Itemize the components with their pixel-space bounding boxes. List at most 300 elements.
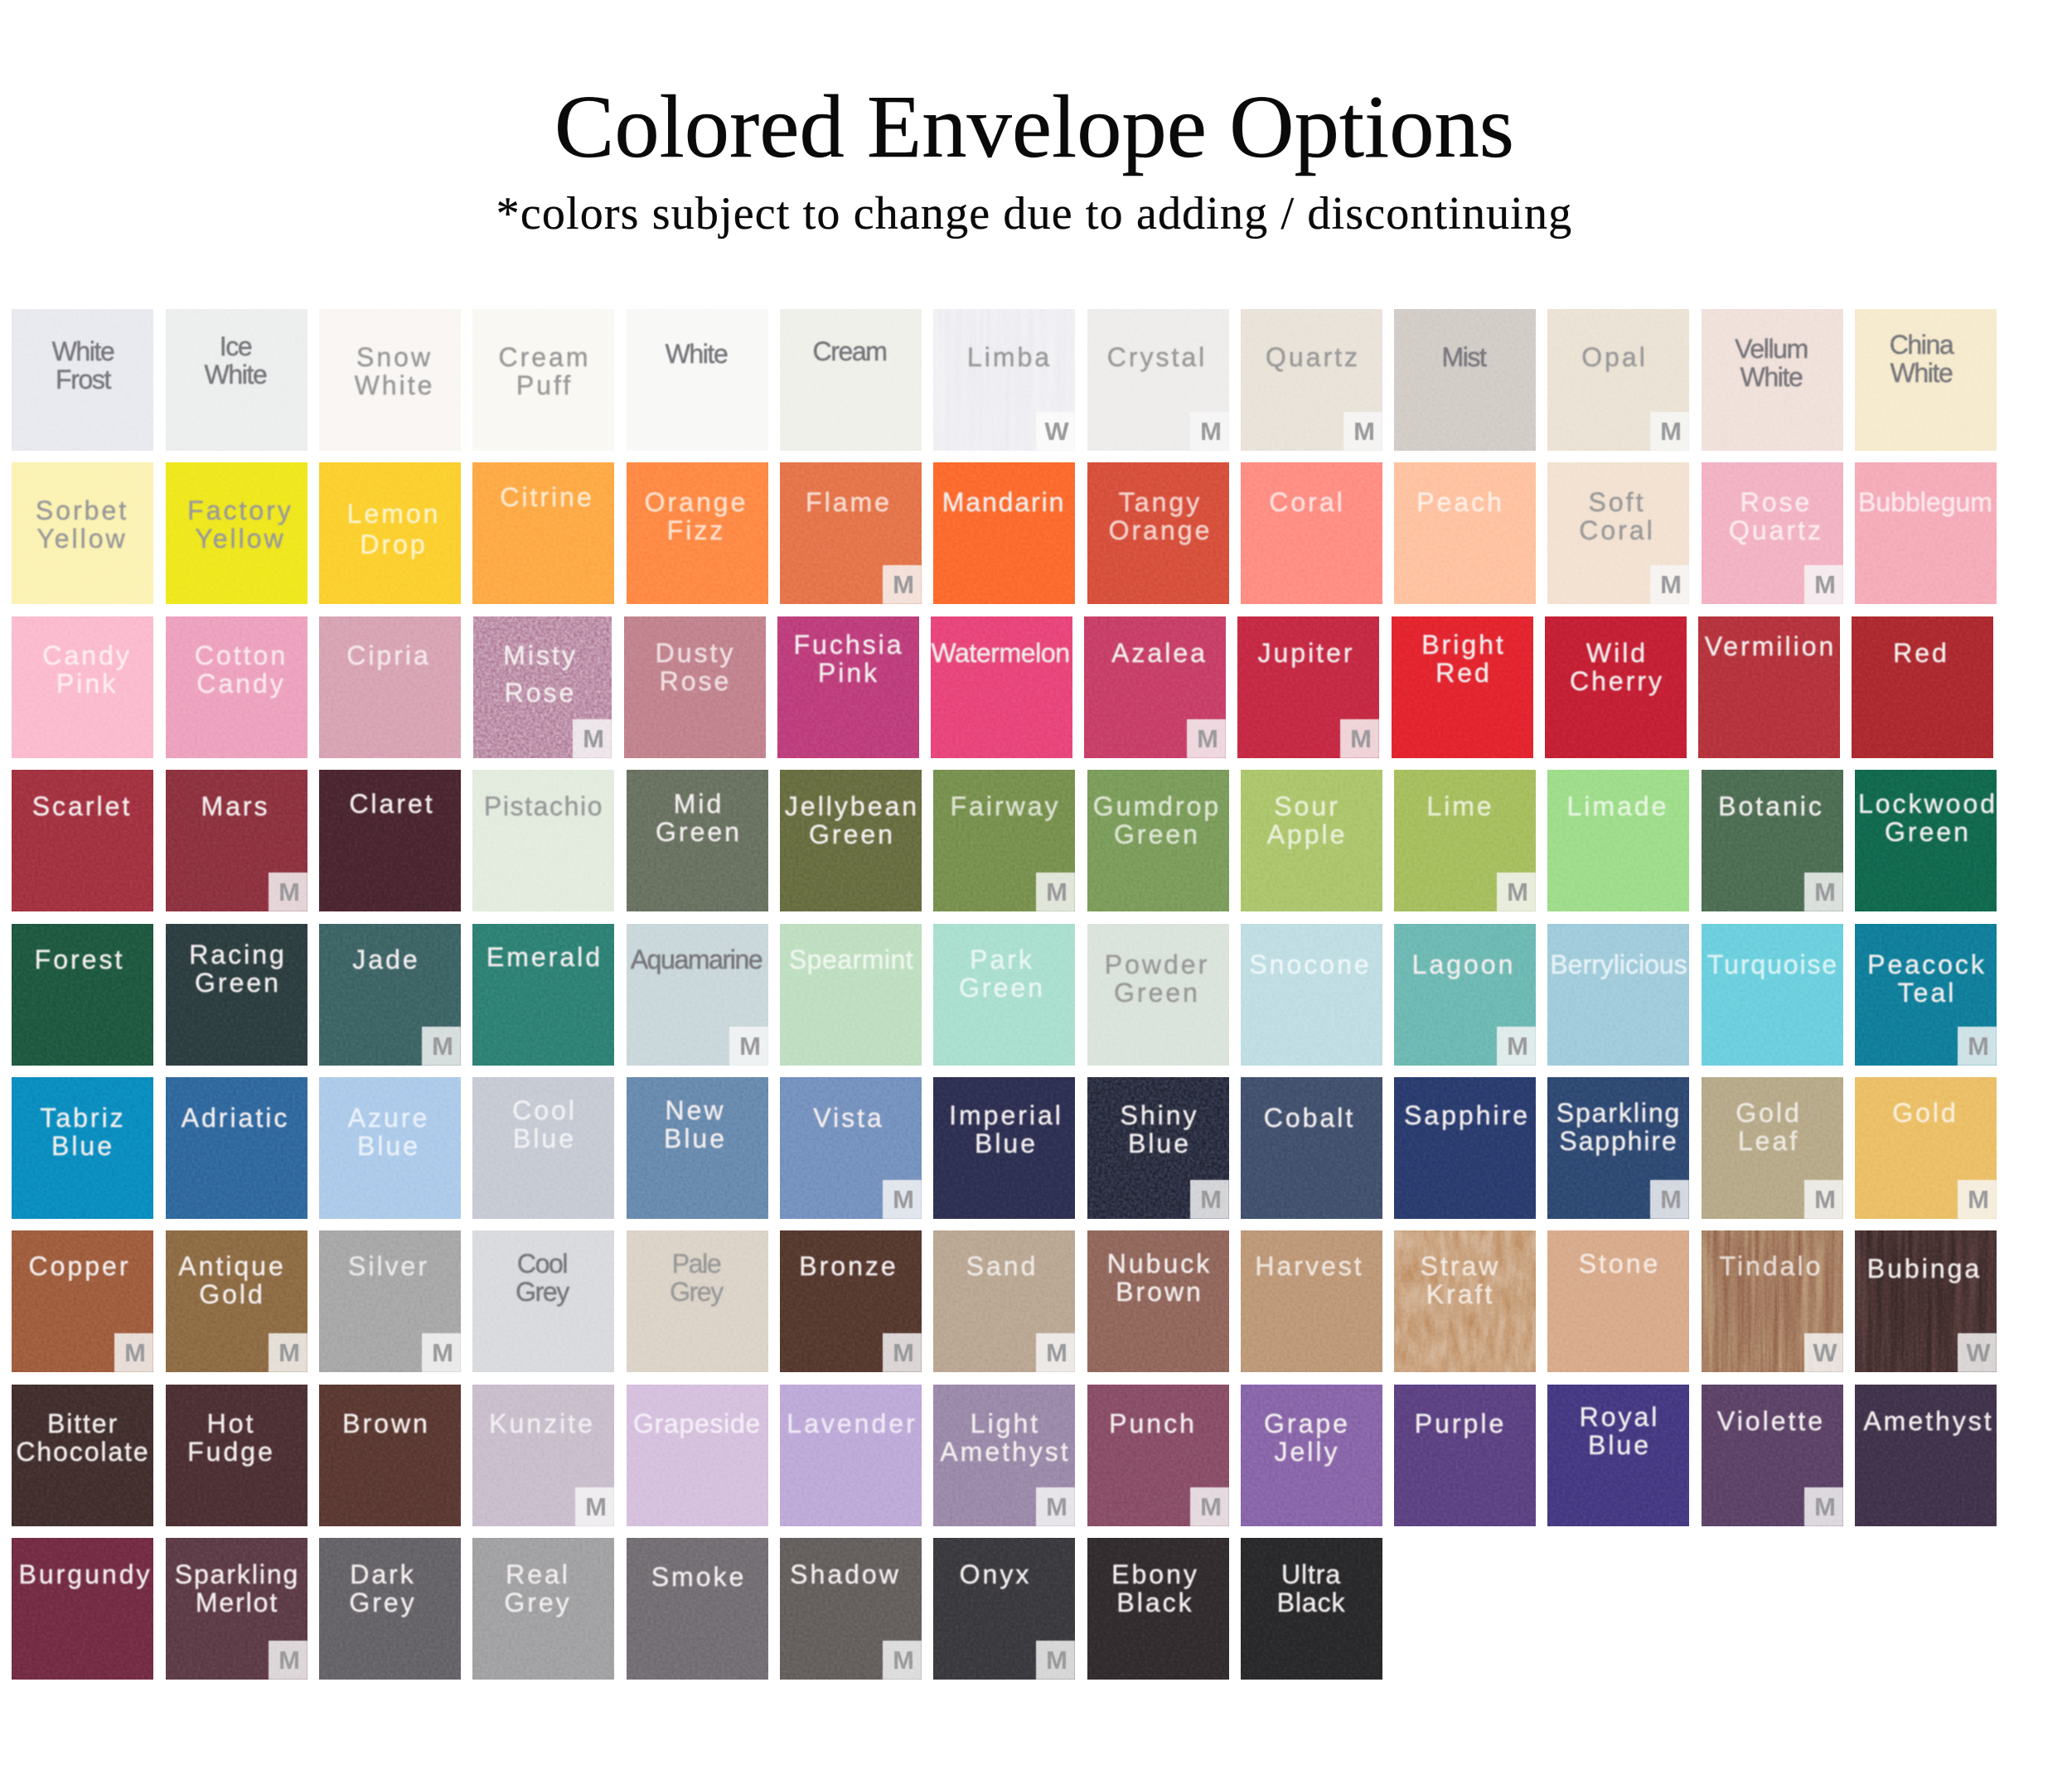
badge: M: M bbox=[1814, 877, 1836, 906]
badge: M: M bbox=[1046, 1646, 1067, 1675]
label: Onyx bbox=[960, 1559, 1031, 1589]
label: Sapphire bbox=[1559, 1126, 1678, 1156]
badge: M bbox=[1036, 1333, 1075, 1372]
label: Imperial bbox=[949, 1100, 1063, 1130]
badge: M: M bbox=[739, 1032, 761, 1061]
label: Berrylicious bbox=[1550, 950, 1687, 979]
badge: W bbox=[1804, 1333, 1843, 1372]
label: Amethyst bbox=[1863, 1406, 1994, 1436]
label: Forest bbox=[35, 945, 124, 974]
label: Snow bbox=[356, 342, 433, 372]
badge: M: M bbox=[1200, 417, 1222, 446]
swatch: Pistachio bbox=[472, 770, 614, 911]
label bbox=[354, 342, 434, 400]
label: Blue bbox=[51, 1131, 114, 1161]
label bbox=[1556, 1099, 1681, 1155]
label bbox=[1736, 1099, 1802, 1155]
badge: M: M bbox=[1353, 417, 1375, 446]
label: Limade bbox=[1567, 791, 1668, 821]
label: Gumdrop bbox=[1093, 791, 1221, 821]
swatch: Mandarin bbox=[933, 462, 1075, 604]
swatch: Royal Blue bbox=[1547, 1385, 1689, 1526]
label: Ice bbox=[220, 331, 251, 361]
swatch: Ice White bbox=[166, 309, 307, 451]
label: Lime bbox=[1426, 791, 1494, 821]
badge: M bbox=[1036, 1641, 1075, 1680]
label: Hot bbox=[207, 1409, 255, 1438]
swatch: Adriatic bbox=[166, 1077, 307, 1219]
label: Blue bbox=[513, 1124, 576, 1153]
label: Antique bbox=[178, 1251, 286, 1281]
label: Mandarin bbox=[942, 487, 1065, 517]
label: Quartz bbox=[1266, 342, 1360, 372]
badge: M: M bbox=[1968, 1032, 1989, 1061]
swatch: Snow White bbox=[319, 309, 461, 451]
swatch: Grape Jelly bbox=[1241, 1385, 1382, 1526]
swatch: Cool Blue bbox=[472, 1077, 614, 1219]
label: Grey bbox=[504, 1588, 572, 1617]
label: Wild bbox=[1586, 638, 1648, 668]
label: Kunzite bbox=[489, 1409, 595, 1438]
label: Candy bbox=[196, 669, 286, 699]
badge: M bbox=[269, 1333, 307, 1372]
label bbox=[949, 1101, 1063, 1158]
swatch: Tabriz Blue bbox=[12, 1077, 153, 1219]
label bbox=[1421, 630, 1506, 688]
badge: M: M bbox=[893, 570, 914, 599]
label: Coral bbox=[1269, 487, 1345, 517]
swatch: Bright Red bbox=[1392, 616, 1533, 758]
swatch: Sand bbox=[933, 1230, 1075, 1372]
label bbox=[793, 630, 904, 688]
swatch: Peacock Teal bbox=[1855, 924, 1997, 1066]
label bbox=[1277, 1560, 1345, 1617]
label: Aquamarine bbox=[631, 945, 762, 974]
label: Light bbox=[971, 1409, 1040, 1438]
swatch: Fairway bbox=[933, 770, 1075, 911]
swatch: Grapeside bbox=[627, 1385, 768, 1526]
swatch: Punch bbox=[1087, 1385, 1229, 1526]
label: Cipria bbox=[346, 641, 431, 670]
swatch: Cobalt bbox=[1241, 1077, 1382, 1219]
label bbox=[348, 1104, 429, 1160]
swatch: Misty Rose bbox=[473, 616, 612, 758]
label: Burgundy bbox=[19, 1559, 152, 1589]
swatch: Emerald bbox=[472, 924, 614, 1066]
label: Blue bbox=[1588, 1430, 1651, 1460]
swatch: Peach bbox=[1394, 462, 1536, 604]
badge: M bbox=[1958, 1180, 1997, 1219]
badge: M: M bbox=[124, 1338, 146, 1367]
swatch: China White bbox=[1855, 309, 1997, 451]
label: Fuchsia bbox=[793, 630, 904, 660]
swatch: Forest bbox=[12, 924, 153, 1066]
label bbox=[656, 789, 742, 847]
label: Yellow bbox=[195, 524, 286, 554]
swatch: Imperial Blue bbox=[933, 1077, 1075, 1219]
label: Citrine bbox=[500, 482, 594, 512]
label bbox=[503, 641, 578, 708]
label bbox=[16, 1409, 150, 1466]
swatch: Quartz bbox=[1241, 309, 1382, 451]
label: Nubuck bbox=[1107, 1249, 1212, 1279]
label: Orange bbox=[645, 487, 748, 517]
swatch: Lemon Drop bbox=[319, 462, 461, 604]
label: Bronze bbox=[799, 1251, 898, 1281]
swatch: Candy Pink bbox=[12, 616, 153, 758]
label: Grey bbox=[516, 1277, 569, 1307]
badge: M: M bbox=[1660, 570, 1682, 599]
swatch grid bbox=[12, 309, 1997, 1680]
badge: M bbox=[1804, 565, 1843, 604]
label: White bbox=[666, 339, 727, 369]
label bbox=[498, 342, 591, 400]
label bbox=[1267, 792, 1347, 848]
badge: M bbox=[883, 1641, 922, 1680]
label: Green bbox=[959, 973, 1045, 1003]
label: Mid bbox=[674, 789, 724, 819]
badge: M: M bbox=[432, 1032, 453, 1061]
label: Bitter bbox=[47, 1409, 119, 1438]
label: Pistachio bbox=[484, 791, 603, 821]
label bbox=[504, 1560, 572, 1617]
label: Sparkling bbox=[175, 1559, 299, 1589]
label: Powder bbox=[1105, 950, 1209, 979]
badge: M bbox=[114, 1333, 153, 1372]
swatch: Lockwood Green bbox=[1855, 770, 1997, 911]
label: Green bbox=[809, 819, 895, 849]
label: Spearmint bbox=[789, 945, 913, 974]
swatch: Ultra Black bbox=[1241, 1538, 1382, 1680]
label bbox=[1734, 334, 1808, 392]
badge: M: M bbox=[1814, 570, 1836, 599]
swatch: Ebony Black bbox=[1087, 1538, 1229, 1680]
swatch: Mid Green bbox=[627, 770, 768, 911]
label bbox=[40, 1104, 126, 1160]
label: Vermilion bbox=[1705, 631, 1836, 661]
label: Bright bbox=[1421, 630, 1506, 660]
label: Pale bbox=[672, 1249, 720, 1279]
swatch: Vermilion bbox=[1698, 616, 1840, 758]
label: Jade bbox=[352, 945, 420, 974]
label bbox=[664, 1096, 727, 1153]
label: Gold bbox=[199, 1279, 265, 1309]
label: White bbox=[355, 370, 434, 400]
label: Candy bbox=[42, 641, 132, 670]
label: Stone bbox=[1579, 1249, 1660, 1279]
swatch: Cool Grey bbox=[472, 1230, 614, 1372]
label: Lockwood bbox=[1858, 789, 1997, 819]
label: Crystal bbox=[1107, 342, 1207, 372]
swatch: Watermelon bbox=[931, 616, 1072, 758]
label: Quartz bbox=[1729, 515, 1823, 545]
label: Black bbox=[1116, 1588, 1194, 1617]
swatch: Gold Leaf bbox=[1702, 1077, 1843, 1219]
swatch: Copper bbox=[12, 1230, 153, 1372]
swatch: Tangy Orange bbox=[1087, 462, 1229, 604]
badge: M bbox=[575, 1487, 614, 1526]
badge: W: W bbox=[1044, 417, 1069, 446]
swatch: White bbox=[627, 309, 768, 451]
badge: M bbox=[1187, 719, 1226, 758]
label: Shiny bbox=[1120, 1100, 1199, 1130]
label: Rose bbox=[660, 666, 731, 696]
swatch: Sour Apple bbox=[1241, 770, 1382, 911]
label: Limba bbox=[967, 342, 1052, 372]
label: Blue bbox=[664, 1124, 727, 1153]
label: Azalea bbox=[1111, 638, 1208, 668]
badge: M bbox=[1497, 1027, 1536, 1066]
swatch: Turquoise bbox=[1702, 924, 1843, 1066]
label bbox=[670, 1250, 723, 1306]
swatch: Cotton Candy bbox=[166, 616, 307, 758]
label: Red bbox=[1435, 658, 1492, 688]
label: Tabriz bbox=[40, 1103, 126, 1133]
label: Cherry bbox=[1570, 666, 1664, 696]
swatch: Jellybean Green bbox=[780, 770, 922, 911]
label: Sparkling bbox=[1556, 1098, 1681, 1128]
badge: M: M bbox=[1046, 1338, 1067, 1367]
swatch: Soft Coral bbox=[1547, 462, 1689, 604]
label: Green bbox=[1114, 819, 1200, 849]
label bbox=[1858, 790, 1997, 846]
label: Ebony bbox=[1111, 1559, 1199, 1589]
label: Copper bbox=[29, 1251, 130, 1281]
label bbox=[516, 1250, 569, 1306]
label: Sorbet bbox=[36, 496, 128, 525]
label bbox=[349, 1560, 417, 1617]
label: Chocolate bbox=[16, 1437, 150, 1467]
label: Straw bbox=[1421, 1251, 1500, 1281]
swatch: Cream Puff bbox=[472, 309, 614, 451]
swatch: Citrine bbox=[472, 462, 614, 604]
label bbox=[178, 1252, 286, 1308]
label: Grape bbox=[1264, 1409, 1350, 1438]
label: Watermelon bbox=[931, 638, 1070, 668]
swatch: Mist bbox=[1394, 309, 1536, 451]
label: Fudge bbox=[187, 1437, 275, 1467]
label: Puff bbox=[516, 370, 573, 400]
badge: M: M bbox=[1200, 1185, 1222, 1214]
badge: M bbox=[422, 1027, 461, 1066]
badge: M: M bbox=[278, 877, 300, 906]
label: Harvest bbox=[1255, 1251, 1364, 1281]
label bbox=[1105, 950, 1209, 1007]
label bbox=[1580, 1403, 1659, 1459]
label bbox=[1421, 1252, 1500, 1308]
label bbox=[1729, 487, 1823, 545]
label: Opal bbox=[1581, 342, 1648, 372]
label: Cream bbox=[498, 342, 591, 372]
badge: M bbox=[422, 1333, 461, 1372]
label: Violette bbox=[1717, 1406, 1825, 1436]
label bbox=[195, 641, 288, 699]
label: Racing bbox=[189, 940, 287, 969]
label bbox=[785, 792, 919, 848]
label: Tangy bbox=[1119, 487, 1202, 517]
swatch: Shadow bbox=[780, 1538, 922, 1680]
label: Merlot bbox=[196, 1588, 278, 1617]
swatch: Dusty Rose bbox=[624, 616, 766, 758]
swatch: Vista bbox=[780, 1077, 922, 1219]
swatch: Bitter Chocolate bbox=[12, 1385, 153, 1526]
label: Scarlet bbox=[32, 791, 132, 821]
swatch: Amethyst bbox=[1855, 1385, 1997, 1526]
swatch: Pale Grey bbox=[627, 1230, 768, 1372]
badge: M: M bbox=[1660, 417, 1682, 446]
label: Blue bbox=[357, 1131, 420, 1161]
swatch: Harvest bbox=[1241, 1230, 1382, 1372]
badge: W bbox=[1036, 412, 1075, 451]
swatch: Wild Cherry bbox=[1545, 616, 1687, 758]
label bbox=[1890, 330, 1955, 388]
swatch: Sparkling Merlot bbox=[166, 1538, 307, 1680]
swatch: Crystal bbox=[1087, 309, 1229, 451]
label: Yellow bbox=[36, 524, 128, 554]
badge: M: M bbox=[1660, 1185, 1682, 1214]
swatch: Burgundy bbox=[12, 1538, 153, 1680]
swatch: Powder Green bbox=[1087, 924, 1229, 1066]
badge: M: M bbox=[1350, 724, 1372, 753]
badge: M bbox=[1958, 1027, 1997, 1066]
swatch: Purple bbox=[1394, 1385, 1536, 1526]
swatch: Factory Yellow bbox=[166, 462, 307, 604]
swatch: Sparkling Sapphire bbox=[1547, 1077, 1689, 1219]
badge: M: M bbox=[893, 1646, 914, 1675]
label: China bbox=[1890, 330, 1953, 360]
label bbox=[512, 1096, 577, 1153]
swatch: Racing Green bbox=[166, 924, 307, 1066]
badge: M bbox=[1190, 1487, 1229, 1526]
label: Leaf bbox=[1738, 1126, 1799, 1156]
label: Gold bbox=[1892, 1098, 1958, 1128]
swatch: Silver bbox=[319, 1230, 461, 1372]
badge: M bbox=[1190, 412, 1229, 451]
label bbox=[42, 641, 132, 699]
label bbox=[1264, 1409, 1350, 1466]
label: Coral bbox=[1579, 515, 1655, 545]
label: White bbox=[205, 360, 266, 389]
badge: M bbox=[1497, 873, 1536, 911]
label: Blue bbox=[975, 1129, 1038, 1158]
label: Lavender bbox=[787, 1409, 917, 1438]
swatch: White Frost bbox=[12, 309, 153, 451]
label bbox=[959, 945, 1045, 1002]
swatch: Lagoon bbox=[1394, 924, 1536, 1066]
label: Gold bbox=[1736, 1098, 1802, 1128]
badge: M bbox=[1804, 1180, 1843, 1219]
label: Brown bbox=[342, 1409, 430, 1438]
label: Sour bbox=[1274, 791, 1340, 821]
swatch: Spearmint bbox=[780, 924, 922, 1066]
label: Snocone bbox=[1249, 950, 1372, 979]
label: Mars bbox=[201, 791, 270, 821]
badge: M: M bbox=[1814, 1185, 1836, 1214]
swatch: Dark Grey bbox=[319, 1538, 461, 1680]
badge: M bbox=[269, 1641, 307, 1680]
label: Cream bbox=[812, 336, 887, 366]
label: Grey bbox=[349, 1588, 417, 1617]
label: Punch bbox=[1109, 1409, 1197, 1438]
label: Tindalo bbox=[1720, 1251, 1823, 1281]
label: Grey bbox=[670, 1277, 723, 1307]
label: Bubblegum bbox=[1858, 487, 1992, 517]
swatch: Cream bbox=[780, 309, 922, 451]
badge: M: M bbox=[1507, 877, 1528, 906]
badge: M bbox=[1190, 1180, 1229, 1219]
swatch: Botanic bbox=[1702, 770, 1843, 911]
badge: M: M bbox=[583, 724, 604, 753]
swatch: Bubblegum bbox=[1855, 462, 1997, 604]
swatch: Real Grey bbox=[472, 1538, 614, 1680]
swatch: Hot Fudge bbox=[166, 1385, 307, 1526]
swatch: Lavender bbox=[780, 1385, 922, 1526]
badge: M: M bbox=[1197, 724, 1218, 753]
swatch: Azure Blue bbox=[319, 1077, 461, 1219]
label: Jelly bbox=[1274, 1437, 1339, 1467]
swatch: Snocone bbox=[1241, 924, 1382, 1066]
label: Cobalt bbox=[1264, 1103, 1355, 1133]
label bbox=[204, 331, 267, 389]
label: White bbox=[1740, 362, 1802, 392]
badge: M bbox=[269, 873, 307, 911]
swatch: Aquamarine bbox=[627, 924, 768, 1066]
label bbox=[189, 940, 287, 997]
swatch: Brown bbox=[319, 1385, 461, 1526]
label: Sapphire bbox=[1404, 1100, 1530, 1130]
swatch: Gold bbox=[1855, 1077, 1997, 1219]
badge: M bbox=[883, 565, 922, 604]
label: Botanic bbox=[1718, 791, 1824, 821]
label bbox=[347, 499, 440, 560]
swatch: Claret bbox=[319, 770, 461, 911]
label: Peacock bbox=[1867, 950, 1987, 979]
swatch: Flame bbox=[780, 462, 922, 604]
label: Park bbox=[970, 945, 1034, 974]
label bbox=[1120, 1101, 1199, 1158]
label bbox=[1109, 487, 1212, 546]
label: Bubinga bbox=[1867, 1254, 1982, 1283]
badge: M: M bbox=[893, 1185, 914, 1214]
swatch: Vellum White bbox=[1702, 309, 1843, 451]
label bbox=[1107, 1250, 1212, 1306]
badge: M bbox=[1804, 873, 1843, 911]
badge: W bbox=[1958, 1333, 1997, 1372]
swatch: Bronze bbox=[780, 1230, 922, 1372]
swatch: Scarlet bbox=[12, 770, 153, 911]
label: Cool bbox=[517, 1249, 567, 1279]
label: Frost bbox=[56, 365, 110, 394]
label: Ultra bbox=[1281, 1559, 1341, 1589]
swatch: Kunzite bbox=[472, 1385, 614, 1526]
badge: M: M bbox=[585, 1492, 607, 1521]
swatch: Jupiter bbox=[1237, 616, 1379, 758]
badge: M bbox=[729, 1027, 768, 1066]
label bbox=[645, 487, 748, 545]
badge: M bbox=[883, 1180, 922, 1219]
label: Fizz bbox=[667, 515, 725, 545]
label: Brown bbox=[1116, 1277, 1203, 1307]
label bbox=[1570, 638, 1664, 697]
badge: M bbox=[1036, 873, 1075, 911]
label: Mist bbox=[1441, 342, 1486, 372]
swatch: Tindalo bbox=[1702, 1230, 1843, 1372]
swatch: Limba bbox=[933, 309, 1075, 451]
label: Cool bbox=[512, 1095, 577, 1125]
badge: W: W bbox=[1813, 1338, 1837, 1367]
subtitle: *colors subject to change due to adding / discontinuing bbox=[496, 188, 1572, 239]
swatch: Cipria bbox=[319, 616, 461, 758]
